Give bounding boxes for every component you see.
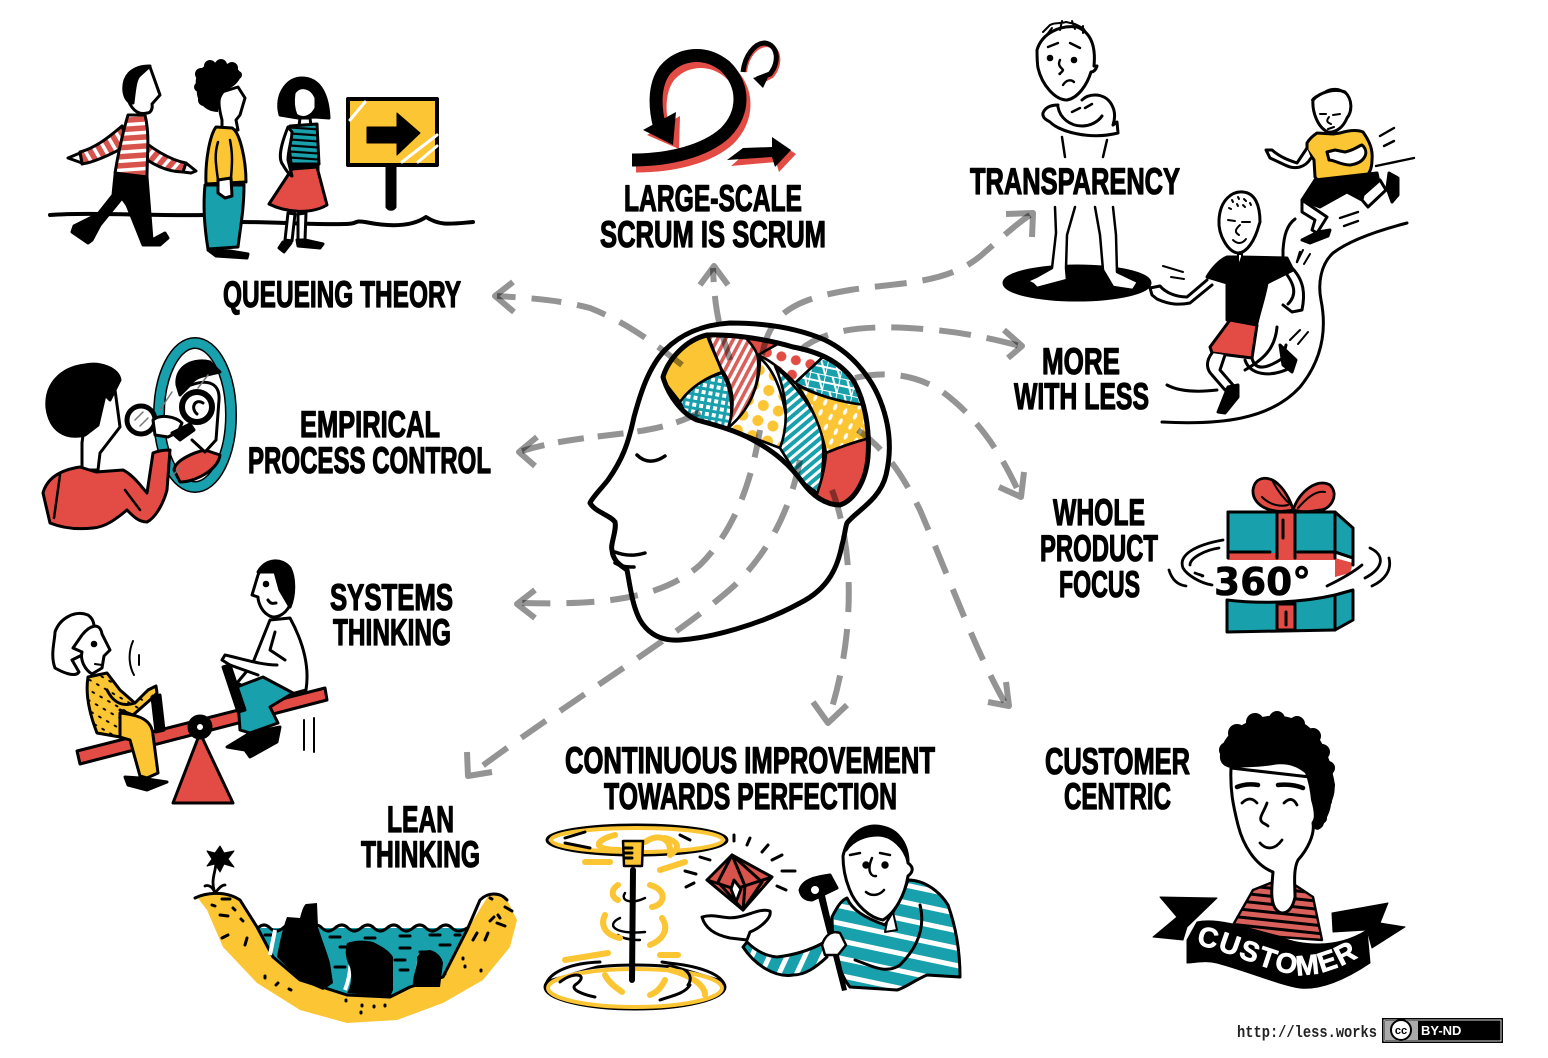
footer url: http://less.works: [1237, 1024, 1377, 1043]
arrow to customer centric: [858, 430, 1009, 706]
label: transparency: TRANSPARENCY: [970, 161, 1180, 202]
legs: [1027, 207, 1075, 288]
banner tails: [1153, 897, 1217, 940]
woman on seesaw: [53, 614, 167, 790]
man on seesaw: [222, 561, 307, 757]
man with hammer: [702, 826, 960, 991]
face features: [1237, 784, 1303, 788]
illustration: customer with banner: [1152, 711, 1406, 989]
label: whole product focus: [1040, 492, 1158, 605]
label: large-scale scrum is scrum: LARGE-SCALE: [624, 178, 802, 219]
sand: [197, 893, 517, 1023]
illustration: continuous improvement, spinning top: [545, 825, 960, 1009]
crossed arms and torso: [1043, 95, 1118, 136]
label: systems thinking: THINKING: [333, 612, 451, 653]
head: [1037, 27, 1097, 100]
illustration: whole product gift box: [1169, 478, 1390, 632]
black arrows: [632, 55, 740, 160]
mouth: [615, 552, 645, 567]
cc by-nd badge: cc: [1395, 1025, 1407, 1037]
closed eye: [637, 455, 665, 461]
banner text: CUSTOMER: [1198, 927, 1358, 976]
cc by-nd badge: BY-ND: [1421, 1023, 1461, 1038]
illustration: transparency, naked man: [1004, 21, 1150, 300]
lower whirl: [545, 953, 725, 1009]
ribbon bow: [1253, 478, 1334, 512]
illustration: large-scale scrum loop: [632, 43, 796, 172]
black rocks: [277, 903, 333, 990]
brain patches: [666, 337, 866, 502]
arrow to transparency: [762, 213, 1033, 355]
running man in black shirt: [1150, 192, 1310, 413]
arrow to continuous improvement: [813, 490, 849, 723]
face: [1231, 768, 1316, 913]
arrow to empirical process control: [519, 412, 700, 466]
head outline: [590, 323, 889, 640]
arrows radiating from brain: [467, 213, 1033, 776]
label: more with less: MORE: [1042, 341, 1120, 382]
label: large-scale scrum is scrum: [600, 178, 826, 255]
running boy in yellow shirt: [1266, 89, 1414, 262]
label: empirical process control: EMPIRICAL: [300, 404, 440, 445]
illustration: queueing theory: [50, 59, 473, 258]
arrow to large-scale scrum: [700, 266, 730, 360]
label: continuous improvement towards perfection: TOWARDS PERFECTION: [604, 776, 897, 817]
box upper half: [1228, 512, 1353, 577]
sand speckles: [212, 898, 512, 1013]
walking man: [68, 66, 196, 245]
arrow to queueing theory: [495, 282, 682, 365]
box lower half: [1227, 590, 1353, 632]
waterline and shoreline: [195, 893, 507, 997]
banner: [1187, 921, 1370, 988]
teal mirror: [159, 343, 231, 487]
fulcrum triangle: [173, 733, 233, 803]
upper whirl: [547, 825, 727, 870]
label: lean thinking: LEAN: [387, 799, 454, 840]
cc by-nd badge: [1382, 1018, 1503, 1043]
arrow to more with less: [800, 327, 1022, 358]
label: empirical process control: [248, 404, 491, 481]
label: customer centric: CENTRIC: [1064, 776, 1171, 817]
label: customer centric: CUSTOMER: [1045, 741, 1190, 782]
standing woman in red skirt: [269, 78, 329, 252]
water dashes: [265, 935, 460, 970]
arrow to systems thinking: [517, 430, 760, 618]
label: empirical process control: PROCESS CONTROL: [248, 440, 491, 481]
illustration: lean thinking, lake and rocks: [195, 846, 517, 1023]
red shadow: [636, 61, 796, 172]
label: customer centric: [1045, 741, 1190, 817]
label: continuous improvement towards perfection: [565, 740, 935, 817]
illustration: more with less, running men on path: [1150, 89, 1414, 423]
water: [257, 928, 467, 997]
arrow to whole product focus: [855, 374, 1024, 497]
road edges: [1162, 223, 1407, 423]
curly hair: [1219, 711, 1335, 830]
label: lean thinking: THINKING: [361, 834, 480, 875]
label: more with less: WITH LESS: [1014, 376, 1149, 417]
motion lines: [304, 718, 314, 752]
red diamond: [685, 835, 795, 910]
label: whole product focus: PRODUCT: [1040, 528, 1158, 569]
ground line: [50, 214, 473, 225]
swirl lines: [1169, 540, 1390, 586]
label: continuous improvement towards perfection: CONTINUOUS IMPROVEMENT: [565, 740, 935, 781]
spinning top rod: [613, 841, 645, 980]
360 degrees text: 360°: [1214, 560, 1311, 604]
yellow sign with arrow: [348, 99, 437, 209]
label: lean thinking: [361, 799, 480, 875]
label: systems thinking: SYSTEMS: [330, 577, 453, 618]
label: whole product focus: WHOLE: [1053, 492, 1145, 533]
yellow motion arcs: [603, 885, 665, 945]
palm flower: [205, 846, 234, 893]
brain outline: [663, 335, 868, 505]
woman: [43, 364, 194, 529]
label: systems thinking: [330, 577, 453, 653]
central head with patchwork brain: [590, 323, 889, 640]
white reflections: [270, 930, 420, 990]
arrow to lean thinking: [467, 460, 800, 776]
illustration: systems thinking, seesaw: [53, 561, 327, 803]
standing person, curly hair: [194, 59, 248, 258]
pivot: [189, 716, 211, 738]
illustration: empirical process, woman at mirror: [43, 343, 231, 529]
label: large-scale scrum is scrum: SCRUM IS SCRUM: [600, 214, 826, 255]
label: more with less: [1014, 341, 1149, 417]
label: whole product focus: FOCUS: [1059, 564, 1140, 605]
red shadow of small loop: [745, 45, 778, 83]
label: queueing theory: QUEUEING THEORY: [223, 274, 461, 315]
striped shirt: [1233, 882, 1322, 940]
dark hole: [1004, 266, 1150, 300]
seesaw beam: [77, 688, 327, 764]
